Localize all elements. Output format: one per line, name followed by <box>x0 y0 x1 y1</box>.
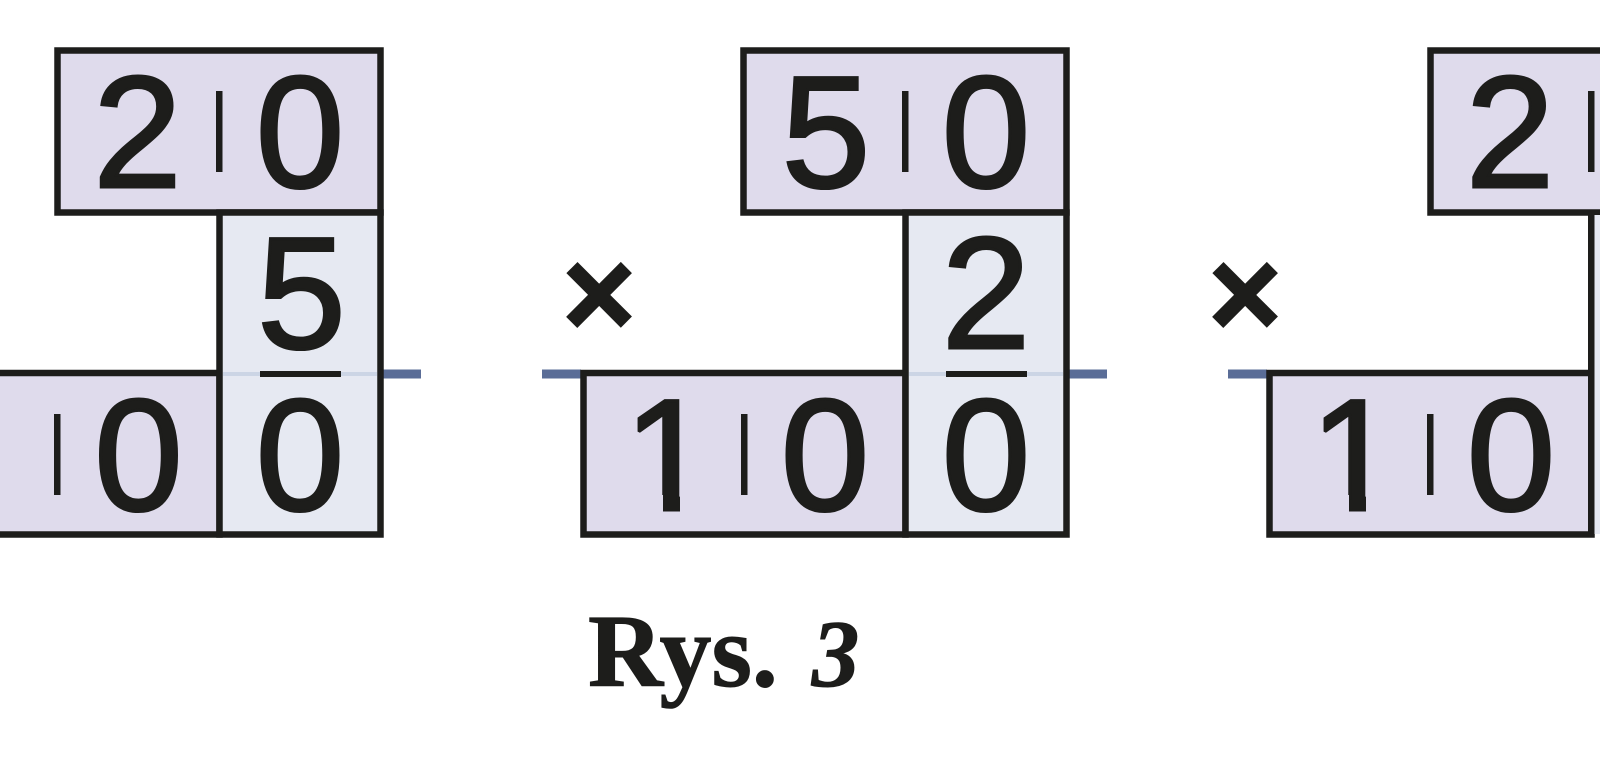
baseline rule, blue <box>542 370 581 378</box>
baseline rule, blue <box>370 370 421 378</box>
baseline rule, blue right <box>1056 370 1107 378</box>
right column: 5 over 0: 0 <box>256 366 344 544</box>
right column: 5 over 0 <box>220 204 380 544</box>
top box: 20 <box>58 43 380 221</box>
bottom box: 100: 1 <box>1310 366 1398 544</box>
multiplication sign: × <box>562 223 636 364</box>
top box: 50: 5 <box>782 43 870 221</box>
top box: 50: 0 <box>942 43 1030 221</box>
multiplication sign: × <box>1208 223 1282 364</box>
top box: 20: 2 <box>93 43 182 221</box>
baseline rule, blue <box>1228 370 1267 378</box>
right column: 5 over 0: 5 <box>257 204 346 382</box>
bottom box: 100 <box>0 366 220 544</box>
right column: 2 over 0: 2 <box>942 204 1030 382</box>
bottom box: 100: 0 <box>1467 366 1555 544</box>
bottom box: 100: 0 <box>781 366 869 544</box>
top box: 50 <box>744 43 1066 221</box>
panel: 50 x 2 = 100 <box>542 43 1107 544</box>
top box: 20: 2 <box>1466 43 1554 221</box>
bottom box: 100: 1 <box>624 366 712 544</box>
bottom box: 100: 0 <box>94 366 183 544</box>
right column: 2 over 0 <box>906 204 1066 544</box>
caption: Rys. 3 <box>588 594 859 709</box>
top box: 20: 0 <box>256 43 344 221</box>
right column divider <box>1588 212 1594 538</box>
top box: 20 <box>1430 43 1600 221</box>
bottom box: 100 <box>584 366 906 544</box>
panel: 20 x 5 = 100 <box>0 43 421 544</box>
right column edge <box>1594 215 1600 534</box>
right column: 2 over 0: 0 <box>942 366 1030 544</box>
bottom box: 100 <box>1270 366 1592 544</box>
panel: 20 x 5 = 100, cropped at right edge <box>1208 43 1600 544</box>
